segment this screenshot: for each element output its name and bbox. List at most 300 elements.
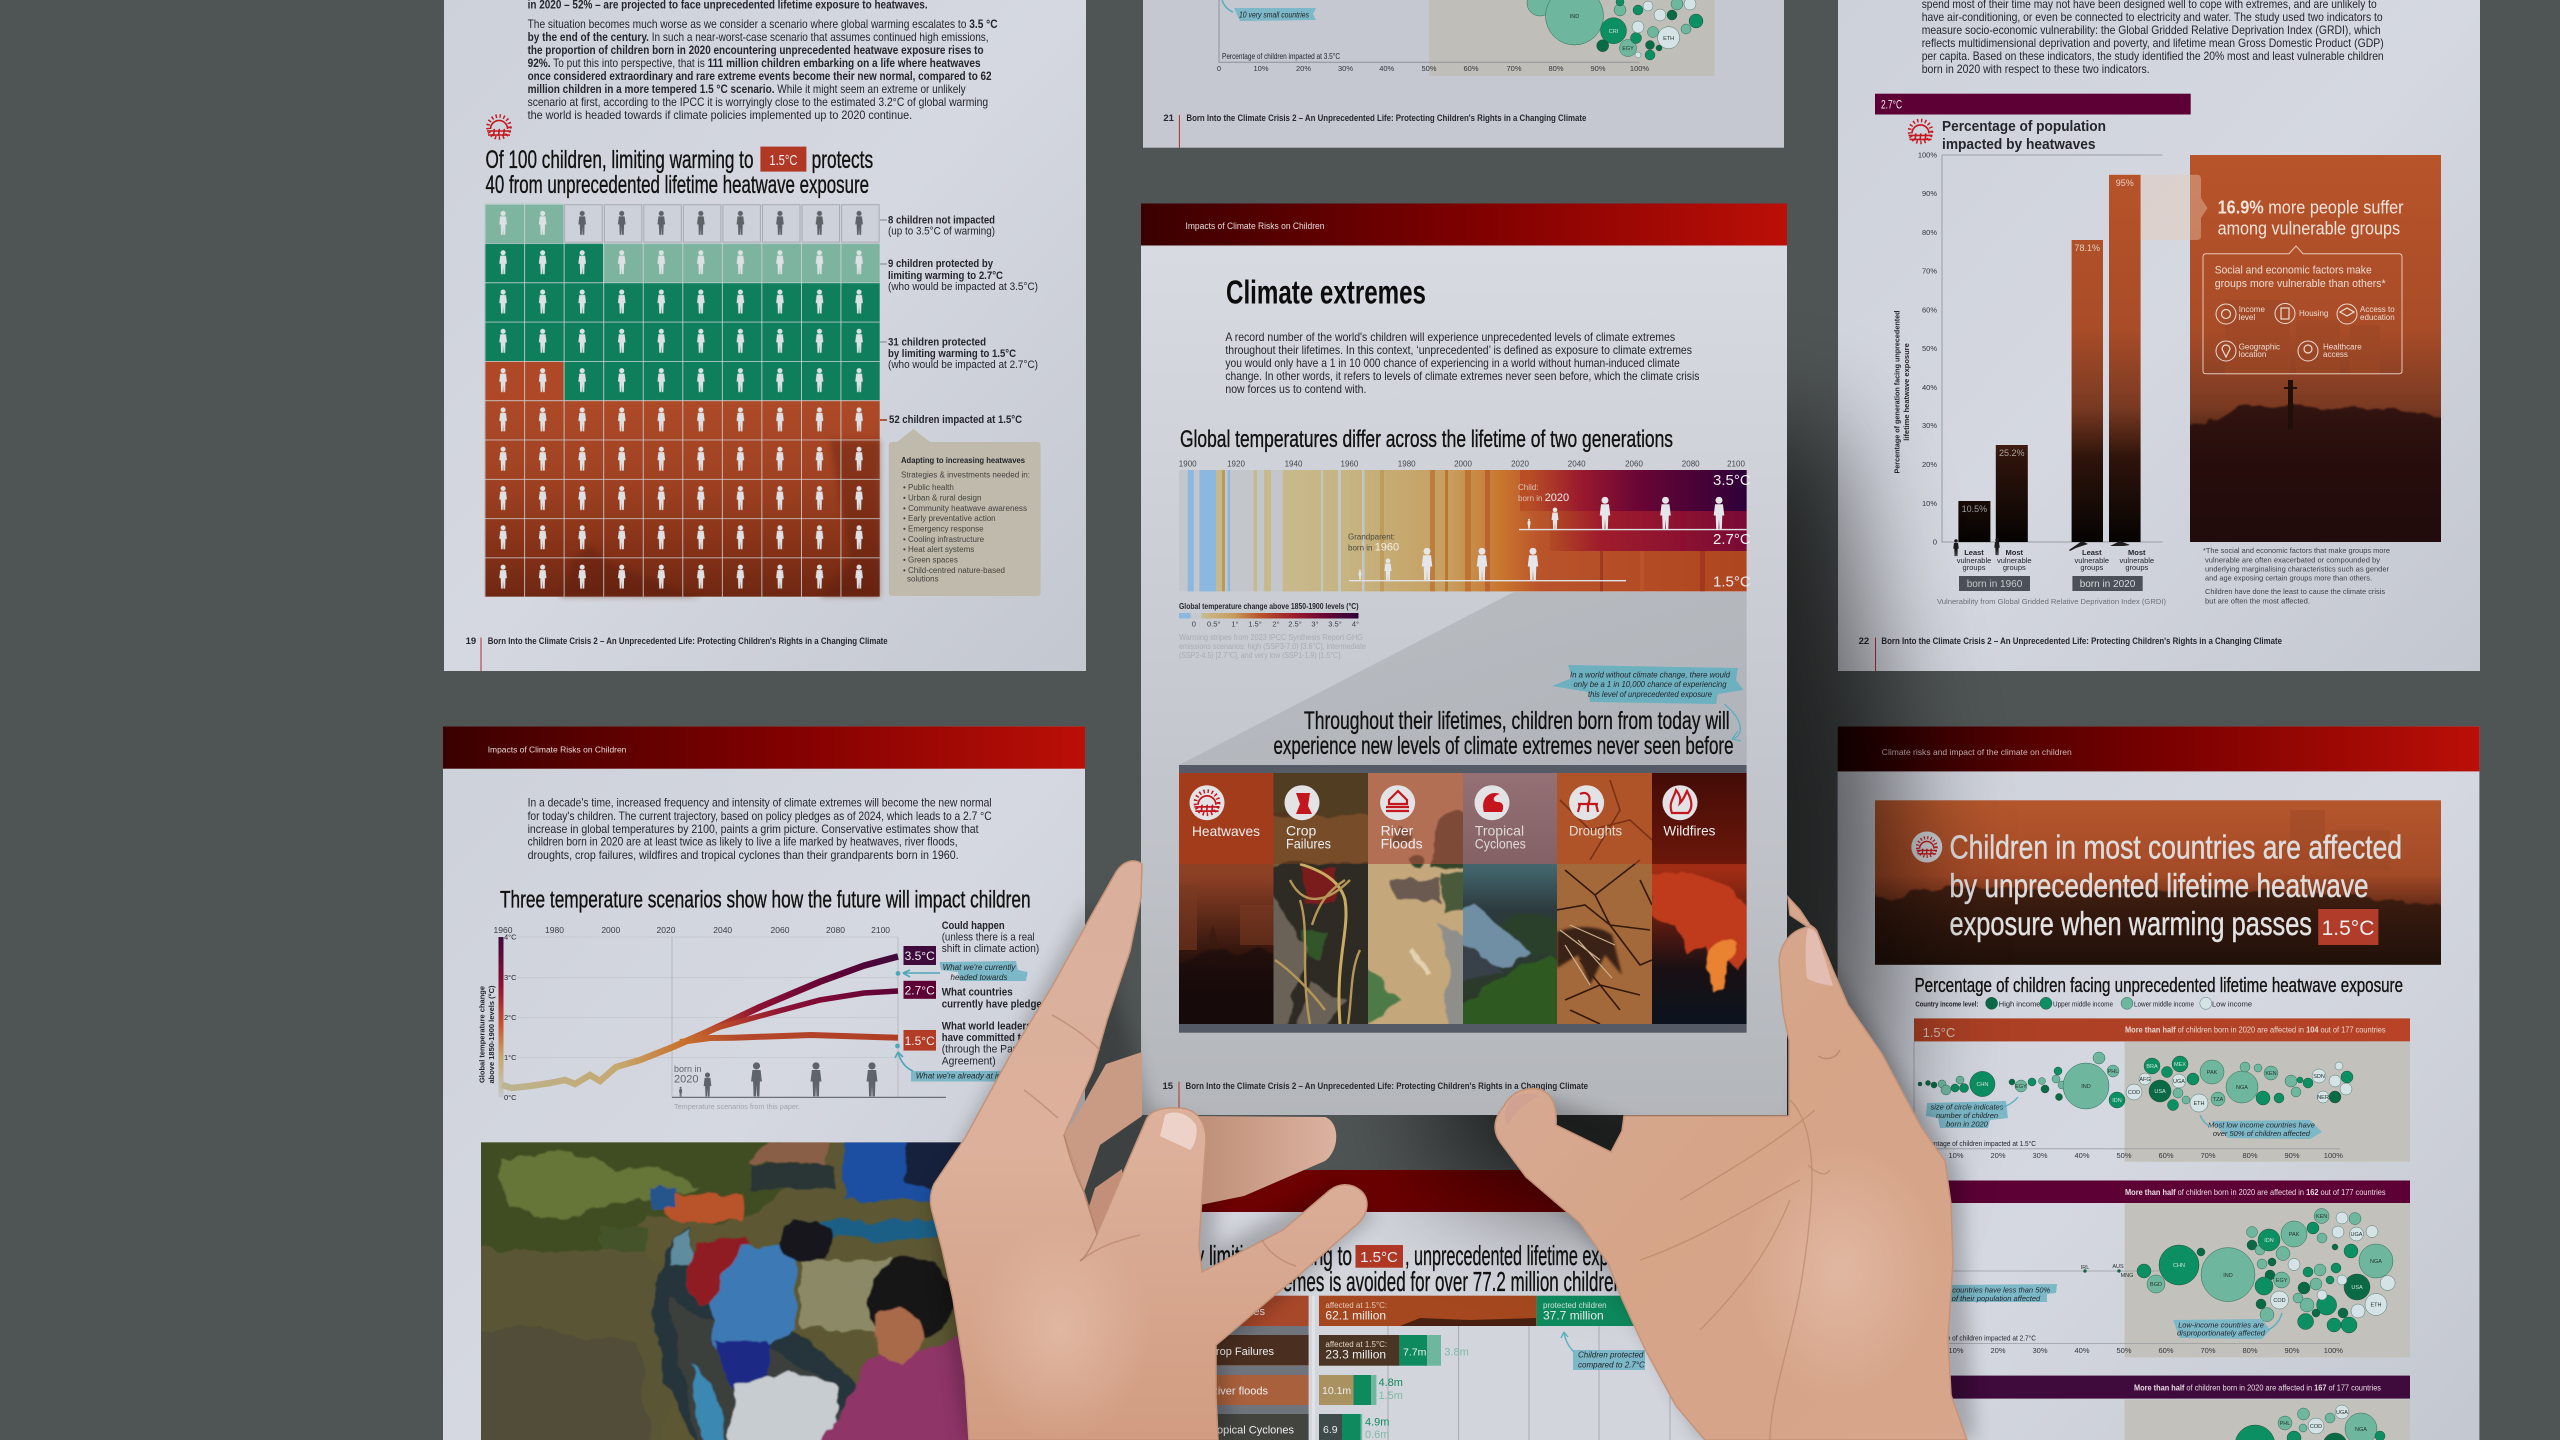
footer page 21: 21 bbox=[1163, 113, 1175, 124]
column: river floods: River bbox=[1381, 822, 1414, 838]
column: tropical cyclones: Tropical bbox=[1475, 822, 1524, 838]
bar chart: 90% bbox=[1922, 189, 1937, 198]
legend: temperature change: 4° bbox=[1352, 620, 1359, 628]
legend: country income level: Upper middle income bbox=[2053, 1000, 2113, 1008]
factors box: access bbox=[2323, 350, 2348, 359]
title: climate extremes: Climate extremes bbox=[1226, 274, 1426, 311]
chart: 1.5C bubbles: 10% bbox=[1948, 1151, 1964, 1160]
heading: throughout their lifetimes bbox=[1274, 707, 1734, 760]
bar chart: 20% bbox=[1922, 460, 1937, 469]
chart: 2.7C bubbles: 50% bbox=[2116, 1346, 2132, 1355]
icon: heatwave sun bbox=[1908, 120, 1932, 142]
axis and ticks: 80% bbox=[1548, 64, 1564, 73]
left hand holding the brochure bbox=[930, 861, 1367, 1440]
chart: 1.5C bubbles: COD bbox=[2128, 1090, 2140, 1096]
waffle labels: 52 children impacted at 1.5°C bbox=[889, 414, 1022, 426]
footnote: Children have done the least to cause the climate crisis bbox=[2205, 587, 2385, 596]
line chart: temperature scenarios: Global temperature change bbox=[478, 986, 486, 1083]
bars: children affected and protected: River floods bbox=[1210, 1386, 1268, 1398]
warming stripes chart: 2040 bbox=[1568, 460, 1586, 468]
bubbles at 3.5C: IND bbox=[1570, 14, 1579, 20]
page 19 body text: the proportion of children born in 2020 encountering unprecedented heatwave exposure rises to bbox=[528, 44, 984, 57]
heading: three temperature scenarios: Three temperature scenarios show how the future will impact children bbox=[500, 886, 1031, 913]
callout: adapting to increasing heatwaves: • Heat alert systems bbox=[903, 545, 974, 554]
chart: 2.7C bubbles: PAK bbox=[2289, 1232, 2300, 1238]
annotation: 15 countries: 15 countries have less than 50% bbox=[1942, 1286, 2051, 1294]
chart: 1.5C bubbles bbox=[1914, 1018, 2410, 1162]
scenario labels bbox=[904, 920, 1048, 1067]
chart: 1.5C bubbles: 20% bbox=[1990, 1151, 2006, 1160]
left hand highlights and creases bbox=[970, 1015, 1296, 1440]
legend: temperature change: 3° bbox=[1311, 620, 1319, 628]
waffle labels: (who would be impacted at 3.5°C) bbox=[888, 281, 1038, 293]
icon: heatwave bbox=[1190, 785, 1224, 820]
hand shadows on the pages bbox=[930, 900, 1975, 1440]
warming stripes chart: 1940 bbox=[1285, 460, 1303, 468]
chart: 3.5C bubbles: More than half of children born in 2020 are affected in 167 of 177 countries bbox=[2134, 1384, 2381, 1392]
line chart: temperature scenarios: 2000 bbox=[601, 925, 621, 935]
column: wildfires: Wildfires bbox=[1663, 822, 1715, 838]
waffle chart: 100 children bbox=[485, 204, 880, 597]
line chart: temperature scenarios: 2100 bbox=[871, 925, 890, 935]
bar chart: 60% bbox=[1922, 306, 1937, 314]
heading: of 100 children bbox=[486, 146, 873, 199]
header band bbox=[1141, 204, 1787, 246]
heading: percentage of children: Percentage of children facing unprecedented lifetime heatwave exposure bbox=[1915, 975, 2403, 997]
annotation: what we are already at: What we're already at in 2025 bbox=[916, 1072, 1022, 1081]
factors box: level bbox=[2239, 313, 2255, 322]
chart: 1.5C bubbles: NGA bbox=[2236, 1085, 2248, 1091]
column: heatwaves bbox=[1179, 773, 1274, 1024]
right hand holding the brochure bbox=[1495, 897, 1967, 1440]
chart: 3.5C bubbles: PHL bbox=[2280, 1421, 2290, 1427]
chart: 3.5C bubbles: UGA bbox=[2336, 1410, 2348, 1416]
bar labels: born in 1960 bbox=[1967, 579, 2023, 590]
panel: 16.9 percent more people suffer: among vulnerable groups bbox=[2218, 219, 2400, 239]
legend: temperature change: (SSP2-4.5) [2.7°C], and very low (SSP1-1.9) [1.5°C]. bbox=[1179, 651, 1342, 660]
bar labels: Most bbox=[2128, 548, 2146, 557]
chart: 2.7C bubbles: COD bbox=[2273, 1298, 2286, 1304]
chart: 1.5C bubbles: KEN bbox=[2265, 1071, 2277, 1077]
column: crop failures: Failures bbox=[1286, 836, 1331, 852]
bars: children affected and protected: 37.7 million bbox=[1543, 1308, 1604, 1322]
hero banner: exposure when warming passes bbox=[1950, 905, 2312, 942]
hero banner: Children in most countries are affected bbox=[1950, 829, 2402, 866]
chart: 1.5C bubbles: Percentage of children impacted at 1.5°C bbox=[1917, 1139, 2037, 1148]
page 22: vulnerable groups bar chart bbox=[1838, 0, 2480, 671]
scenario labels: 3.5°C bbox=[905, 949, 935, 963]
chart: 1.5C bubbles: USA bbox=[2154, 1089, 2166, 1095]
heading: of 100 children: Of 100 children, limiting warming to bbox=[486, 146, 754, 174]
right hand highlights and creases bbox=[1505, 928, 1940, 1440]
line chart: temperature scenarios: 1980 bbox=[545, 925, 564, 935]
footer page 19: 19 bbox=[466, 636, 476, 647]
callout: adapting to increasing heatwaves: solutions bbox=[907, 574, 939, 584]
line chart: temperature scenarios: born in bbox=[674, 1064, 702, 1074]
chart: 2.7C bubbles: 80% bbox=[2242, 1346, 2258, 1355]
annotation: world without climate change: this level of unprecedented exposure bbox=[1588, 689, 1712, 699]
icon: crop failures bbox=[1284, 785, 1320, 820]
chart: 2.7C bubbles: UGA bbox=[2351, 1232, 2363, 1238]
footnote: underlying marginalising characteristics such as gender bbox=[2205, 565, 2389, 574]
chart: 1.5C bubbles: 40% bbox=[2074, 1151, 2090, 1160]
scenario labels: 1.5°C bbox=[905, 1034, 935, 1048]
page: heatwave exposure bubble charts bbox=[1838, 726, 2479, 1440]
annotation: low income 50 percent bbox=[2200, 1115, 2322, 1139]
annotation: circle size bbox=[1926, 1097, 2018, 1128]
annotation: what we are headed towards bbox=[896, 961, 1028, 982]
header band bbox=[443, 726, 1085, 769]
chart: 2.7C bubbles: 90% bbox=[2284, 1346, 2300, 1355]
line chart: temperature scenarios: 3°C bbox=[504, 973, 517, 982]
bar chart: 0 bbox=[1933, 538, 1937, 546]
bubbles at 3.5C: CRI bbox=[1609, 29, 1619, 35]
body text: children born in 2020 are at least twice as likely to live a life marked by heatwaves, river floods, bbox=[528, 835, 958, 849]
chart title: impacted by heatwaves bbox=[1942, 137, 2096, 153]
axis and ticks: 50% bbox=[1421, 64, 1437, 73]
chart: 1.5C bubbles: BRA bbox=[2146, 1064, 2158, 1070]
page 22 body text bbox=[1922, 0, 2384, 76]
bar labels: born in 2020 bbox=[2080, 579, 2136, 590]
line chart: temperature scenarios: Temperature scenarios from this paper. bbox=[674, 1102, 800, 1111]
body text bbox=[528, 796, 992, 862]
bar labels: vulnerable bbox=[2074, 556, 2109, 565]
page 19 body text: once considered extraordinary and rare extreme events become their new normal, compared to 62 bbox=[528, 70, 992, 83]
warming stripes chart: 2100 bbox=[1727, 460, 1745, 468]
bar chart: 25.2% bbox=[1999, 448, 2025, 458]
chart: 2.7C bubbles: USA bbox=[2351, 1285, 2363, 1291]
warming stripes chart bbox=[1179, 460, 1751, 591]
factors box: groups more vulnerable than others* bbox=[2215, 278, 2386, 290]
footer page 19 bbox=[466, 636, 888, 671]
bars: children affected and protected: 10.1m bbox=[1322, 1385, 1351, 1397]
footer page 15: 15 bbox=[1162, 1081, 1174, 1092]
warming stripes chart: 2020 bbox=[1511, 460, 1529, 468]
scenario labels: (through the Paris bbox=[942, 1043, 1024, 1055]
chart: 1.5C bubbles: PHL bbox=[2108, 1069, 2118, 1075]
factors box: Income bbox=[2239, 305, 2265, 314]
header band: Impacts of Climate Risks on Children bbox=[488, 745, 627, 755]
intro paragraph bbox=[1225, 330, 1699, 396]
intro paragraph: A record number of the world's children will experience unprecedented levels of climate extremes bbox=[1225, 330, 1675, 344]
bar chart: 70% bbox=[1922, 266, 1937, 276]
chart: 2.7C bubbles: 60% bbox=[2158, 1346, 2174, 1355]
icon: tropical cyclones bbox=[1474, 785, 1510, 820]
axis and ticks: 60% bbox=[1463, 64, 1479, 73]
chart: 2.7C bubbles: IND bbox=[2223, 1273, 2233, 1279]
page 19: children protected heatwave grid bbox=[444, 0, 1086, 671]
middle finger under the page bbox=[1190, 1116, 1336, 1205]
page 22 body text: per capita. Based on these indicators, the study identified the 20% most and least vulnerable children bbox=[1922, 50, 2384, 63]
page: three temperature scenarios with photo bbox=[443, 726, 1085, 1440]
heading: limiting warming: to climate extremes is avoided for over 77.2 million children bbox=[1177, 1266, 1623, 1297]
heading: of 100 children: 40 from unprecedented lifetime heatwave exposure bbox=[486, 171, 869, 199]
legend: country income level bbox=[1915, 997, 2252, 1009]
bar labels: Vulnerability from Global Gridded Relative Deprivation Index (GRDI) bbox=[1937, 597, 2167, 606]
chart: 2.7C bubbles: 100% bbox=[2324, 1346, 2343, 1355]
factors box: Geographic bbox=[2239, 342, 2280, 352]
chart: 2.7C bubbles: NGA bbox=[2370, 1259, 2382, 1265]
column: crop failures: Crop bbox=[1286, 822, 1317, 838]
chart: 2.7C bubbles: KEN bbox=[2316, 1214, 2327, 1220]
chart: 1.5C bubbles: 80% bbox=[2242, 1151, 2258, 1160]
page 19 body text: the world is headed towards if climate policies implemented up to 2020 continue. bbox=[528, 109, 912, 122]
bar chart: 50% bbox=[1922, 344, 1937, 353]
footnote: but are often the most affected. bbox=[2205, 597, 2310, 606]
annotation: low income disproportionate: disproportionately affected bbox=[2177, 1328, 2266, 1338]
panel: six climate extremes bbox=[1165, 765, 1755, 1035]
callout: adapting to increasing heatwaves: Strategies & investments needed in: bbox=[901, 470, 1030, 480]
chart: 2.7C bubbles bbox=[1914, 1180, 2410, 1357]
bar chart: 30% bbox=[1922, 421, 1937, 430]
chart: 2.7C bubbles: ETH bbox=[2370, 1302, 2382, 1308]
callout: adapting to increasing heatwaves: • Emergency response bbox=[903, 525, 984, 534]
footer page 15 bbox=[1162, 1081, 1588, 1115]
bars: children affected and protected: 3.8m bbox=[1444, 1347, 1469, 1359]
footnote: *The social and economic factors that make groups more bbox=[2203, 546, 2390, 555]
bar labels: vulnerable bbox=[1997, 556, 2032, 565]
page 22 body text: born in 2020 with respect to these two indicators. bbox=[1922, 63, 2150, 76]
scenario labels: Could happen bbox=[942, 920, 1005, 932]
chart title: Percentage of population bbox=[1942, 119, 2106, 135]
callout: adapting to increasing heatwaves: • Cooling infrastructure bbox=[903, 535, 985, 544]
chart: 2.7C bubbles: BGD bbox=[2150, 1282, 2162, 1288]
scenario labels: What world leaders bbox=[942, 1020, 1032, 1032]
bar chart: 95% bbox=[2116, 178, 2134, 188]
bar labels: vulnerable bbox=[1957, 556, 1991, 565]
annotation: world without climate change: only be a 1 in 10,000 chance of experiencing bbox=[1574, 679, 1727, 689]
hand, index finger and thumb bbox=[930, 861, 1367, 1440]
grandparent silhouettes: Grandparent: bbox=[1348, 533, 1395, 542]
legend: temperature change: 2.5° bbox=[1288, 620, 1302, 628]
waffle labels bbox=[880, 214, 1038, 426]
bar chart: lifetime heatwave exposure bbox=[1902, 343, 1911, 441]
column: droughts bbox=[1557, 773, 1652, 1024]
intro paragraph: you would only have a 1 in 10 000 chance of experiencing in a world without human-induced climate bbox=[1225, 356, 1680, 370]
footer page 21: Born Into the Climate Crisis 2 – An Unprecedented Life: Protecting Children's Rights in a Changing Climate bbox=[1186, 113, 1586, 124]
footer page 22: Born Into the Climate Crisis 2 – An Unprecedented Life: Protecting Children's Rights in a Changing Climate bbox=[1881, 636, 2282, 647]
heading: limiting warming: 1.5°C bbox=[1360, 1249, 1398, 1266]
footer page 19: Born Into the Climate Crisis 2 – An Unprecedented Life: Protecting Children's Rights in a Changing Climate bbox=[488, 636, 888, 647]
line chart: temperature scenarios: 2040 bbox=[713, 925, 732, 935]
annotation: 15 countries bbox=[1942, 1284, 2057, 1303]
body text: increase in global temperatures by 2100, paints a grim picture. Conservative estimates show that bbox=[528, 822, 979, 836]
chart: 1.5C bubbles: 50% bbox=[2116, 1151, 2132, 1160]
warming stripes chart: 1.5°C bbox=[1713, 574, 1751, 591]
line chart: temperature scenarios: above 1850-1900 levels (°C) bbox=[487, 985, 496, 1084]
chart: 2.7C bubbles: 10% bbox=[1948, 1346, 1964, 1355]
scenario labels: (unless there is a real bbox=[942, 931, 1035, 943]
icon: river floods bbox=[1380, 785, 1415, 820]
bars: children affected and protected: Heatwaves bbox=[1211, 1306, 1265, 1318]
axis and ticks: Percentage of children impacted at 3.5°C bbox=[1222, 52, 1340, 61]
line chart: temperature scenarios: 1°C bbox=[504, 1053, 517, 1062]
annotation: children protected bbox=[1561, 1332, 1645, 1370]
annotation: 10 very small countries: 10 very small countries bbox=[1239, 10, 1310, 20]
legend: temperature change: 3.5° bbox=[1328, 620, 1342, 628]
chart: 1.5C bubbles: AFG bbox=[2139, 1077, 2151, 1083]
chart: 3.5C bubbles bbox=[1914, 1376, 2410, 1440]
bar labels: groups bbox=[1963, 563, 1986, 572]
header band: Climate risks and impact of the climate on children bbox=[1882, 747, 2072, 757]
footer page 22: 22 bbox=[1859, 636, 1869, 647]
intro paragraph: now forces us to contend with. bbox=[1225, 382, 1366, 396]
callout: adapting to increasing heatwaves bbox=[889, 429, 1041, 596]
page 19 body text: million children in a more tempered 1.5 °C scenario. While it might seem an extreme or unlikely bbox=[528, 83, 966, 96]
column: wildfires bbox=[1652, 773, 1755, 1024]
cast shadow of centre brochure bbox=[1430, 420, 1900, 1260]
chart: 1.5C bubbles: NER bbox=[2317, 1095, 2329, 1101]
grandparent silhouettes bbox=[1348, 533, 1626, 581]
footer page 21 bbox=[1163, 113, 1586, 148]
factors box: Healthcare bbox=[2323, 342, 2362, 352]
icon: heatwave sun bbox=[487, 116, 511, 138]
third finger bbox=[1084, 1169, 1125, 1240]
callout: adapting to increasing heatwaves: • Community heatwave awareness bbox=[903, 504, 1027, 513]
axis and ticks: 10% bbox=[1253, 64, 1269, 73]
bar chart: 78.1% bbox=[2075, 243, 2100, 253]
annotation: children protected: compared to 2.7°C bbox=[1578, 1360, 1645, 1369]
column: heatwaves: Heatwaves bbox=[1192, 823, 1260, 839]
factors box: Housing bbox=[2299, 309, 2328, 318]
chart title bbox=[1942, 119, 2106, 153]
scenario labels: Agreement) bbox=[942, 1055, 996, 1067]
callout: adapting to increasing heatwaves: • Child-centred nature-based bbox=[903, 566, 1005, 575]
bars: children affected and protected: 6.9 bbox=[1323, 1424, 1338, 1436]
bar labels: groups bbox=[2125, 563, 2149, 572]
warming stripes chart: 2000 bbox=[1454, 460, 1472, 468]
annotation: circle size: size of circle indicates bbox=[1931, 1102, 2004, 1112]
page 22 body text: have air-conditioning, or even be connected to electricity and water. The study used two indicators to bbox=[1922, 11, 2383, 24]
page 22 body text: measure socio-economic vulnerability: the Global Gridded Relative Deprivation Index (GRDI), which bbox=[1922, 24, 2381, 37]
annotation: circle size: born in 2020 bbox=[1946, 1120, 1989, 1128]
icon: wildfires bbox=[1662, 785, 1698, 820]
warming stripes chart: 1920 bbox=[1227, 460, 1245, 468]
chart: 1.5C bubbles: More than half of children born in 2020 are affected in 104 out of 177 countries bbox=[2125, 1026, 2386, 1035]
axis and ticks: 30% bbox=[1338, 64, 1353, 73]
photo: children in a boat on flood water bbox=[470, 1130, 1085, 1440]
bubbles at 3.5C: EGY bbox=[1622, 46, 1634, 52]
factors box: education bbox=[2360, 313, 2395, 322]
callout: adapting to increasing heatwaves: • Early preventative action bbox=[903, 514, 996, 523]
chart: 1.5C bubbles: ETH bbox=[2194, 1101, 2205, 1107]
chart: 1.5C bubbles: 70% bbox=[2200, 1151, 2216, 1160]
body text: droughts, crop failures, wildfires and tropical cyclones than their grandparents born in 1960. bbox=[528, 848, 959, 862]
chart: 1.5C bubbles: 90% bbox=[2284, 1151, 2300, 1160]
chart: 2.7C bubbles: AUS bbox=[2112, 1264, 2124, 1270]
factors box bbox=[2203, 246, 2402, 374]
warming stripes chart: 2.7°C bbox=[1713, 531, 1751, 548]
chart: 2.7C bubbles: CHN bbox=[2173, 1263, 2185, 1269]
column: droughts: Droughts bbox=[1569, 822, 1622, 838]
callout: adapting to increasing heatwaves: • Public health bbox=[903, 483, 954, 492]
legend: temperature change bbox=[1179, 602, 1366, 660]
grandparent silhouettes: born in 1960 bbox=[1348, 542, 1399, 554]
hero banner: by unprecedented lifetime heatwave bbox=[1950, 867, 2368, 904]
centre page: climate extremes bbox=[1141, 204, 1787, 1115]
page 19 body text: scenario at first, according to the IPCC it is worryingly close to the estimated 3.2°C of global warming bbox=[528, 96, 988, 109]
bars: children affected and protected: 4.8m bbox=[1378, 1377, 1403, 1389]
page 19 body text: 92%. To put this into perspective, that is 111 million children embarking on a life where heatwaves bbox=[528, 57, 981, 70]
line chart: temperature scenarios: 1960 bbox=[494, 925, 513, 935]
footer page 22 bbox=[1859, 636, 2282, 671]
footnote: vulnerable are often exacerbated or compounded by bbox=[2205, 555, 2380, 564]
warming stripes chart: 2060 bbox=[1625, 460, 1643, 468]
legend: temperature change: 2° bbox=[1272, 620, 1280, 628]
line chart: temperature scenarios: 4°C bbox=[504, 932, 517, 942]
bar chart: 100% bbox=[1918, 150, 1937, 160]
line chart: temperature scenarios bbox=[478, 925, 946, 1111]
factors box: Social and economic factors make bbox=[2215, 265, 2372, 277]
waffle labels: (up to 3.5°C of warming) bbox=[888, 226, 995, 238]
waffle labels: (who would be impacted at 2.7°C) bbox=[888, 359, 1038, 371]
chart: 1.5C bubbles: UGA bbox=[2173, 1079, 2185, 1085]
bars: children affected and protected bbox=[1200, 1296, 1707, 1440]
heading: of 100 children: 1.5°C bbox=[769, 152, 798, 169]
line chart: temperature scenarios: 2020 bbox=[657, 925, 676, 935]
axis and ticks: 100% bbox=[1630, 64, 1649, 73]
chart: 2.7C bubbles: EGY bbox=[2276, 1278, 2288, 1284]
intro paragraph: throughout their lifetimes. In this context, ‘unprecedented’ is defined as exposure to climate extremes bbox=[1225, 343, 1692, 357]
bars: children affected and protected: affected at 1.5°C: bbox=[1325, 1301, 1387, 1310]
callout: adapting to increasing heatwaves: Adapting to increasing heatwaves bbox=[901, 456, 1026, 465]
legend: country income level: Low income bbox=[2212, 1000, 2252, 1008]
scenario labels: What countries bbox=[942, 986, 1013, 998]
annotation: low income 50 percent: over 50% of children affected bbox=[2213, 1129, 2311, 1138]
chart: 1.5C bubbles: 100% bbox=[2324, 1151, 2343, 1160]
annotation: low income disproportionate: Low-income countries are bbox=[2178, 1321, 2264, 1330]
panel: 16.9 percent more people suffer bbox=[2141, 155, 2441, 542]
chart: 1.5C bubbles: 1.5°C bbox=[1923, 1025, 1955, 1040]
annotation: 15 countries: of their population affected bbox=[1952, 1294, 2041, 1303]
warming stripes chart: 2080 bbox=[1682, 460, 1700, 468]
page 21: bubble chart fragment bbox=[1143, 0, 1784, 148]
palm and thumb bbox=[1495, 897, 1967, 1440]
warming stripes chart: 3.5°C bbox=[1713, 472, 1751, 489]
annotation: what we are headed towards: headed towards bbox=[951, 973, 1007, 982]
annotation: world without climate change bbox=[1552, 665, 1744, 741]
bars: children affected and protected: 23.3 million bbox=[1325, 1348, 1386, 1362]
axis and ticks bbox=[1217, 0, 1649, 73]
banner: 2.7C: 2.7°C bbox=[1881, 98, 1902, 112]
bars: children affected and protected: protected children bbox=[1543, 1301, 1607, 1310]
bars: children affected and protected: Tropical Cyclones bbox=[1207, 1425, 1294, 1437]
chart: 2.7C bubbles: 30% bbox=[2032, 1346, 2048, 1355]
bar labels: Least bbox=[1964, 548, 1984, 557]
annotation: what we are headed towards: What we're currently bbox=[943, 963, 1016, 972]
header band bbox=[1838, 726, 2479, 771]
bar chart: 10.5% bbox=[1962, 504, 1987, 514]
chart: 3.5C bubbles: NGA bbox=[2355, 1427, 2367, 1433]
page 19 body text: by the end of the century. In such a near-worst-case scenario that assumes continued high emissions, bbox=[528, 31, 989, 44]
bar chart: 10% bbox=[1922, 499, 1937, 508]
bars: children affected and protected: 1.5m bbox=[1378, 1390, 1403, 1402]
heading: global temperatures: Global temperatures differ across the lifetime of two generations bbox=[1180, 426, 1673, 453]
grey wedge bbox=[1179, 592, 1747, 765]
bar labels bbox=[1937, 538, 2167, 606]
legend: temperature change: 1.5° bbox=[1248, 620, 1262, 628]
factors box: location bbox=[2239, 350, 2266, 359]
bar chart: 80% bbox=[1922, 228, 1937, 237]
legend: temperature change: 1° bbox=[1231, 620, 1239, 628]
column: river floods bbox=[1368, 773, 1463, 1024]
legend: temperature change: emissions scenarios: high (SSP3-7.0) [3.6°C], intermediate bbox=[1179, 642, 1366, 651]
bar chart bbox=[1892, 150, 2162, 546]
warming stripes chart: 1960 bbox=[1341, 460, 1359, 468]
intro paragraph: change. In other words, it refers to levels of climate extremes never seen before, which the climate crisis bbox=[1225, 369, 1699, 383]
chart: 1.5C bubbles: PAK bbox=[2207, 1070, 2218, 1076]
bars: children affected and protected: 4.9m bbox=[1365, 1417, 1389, 1429]
